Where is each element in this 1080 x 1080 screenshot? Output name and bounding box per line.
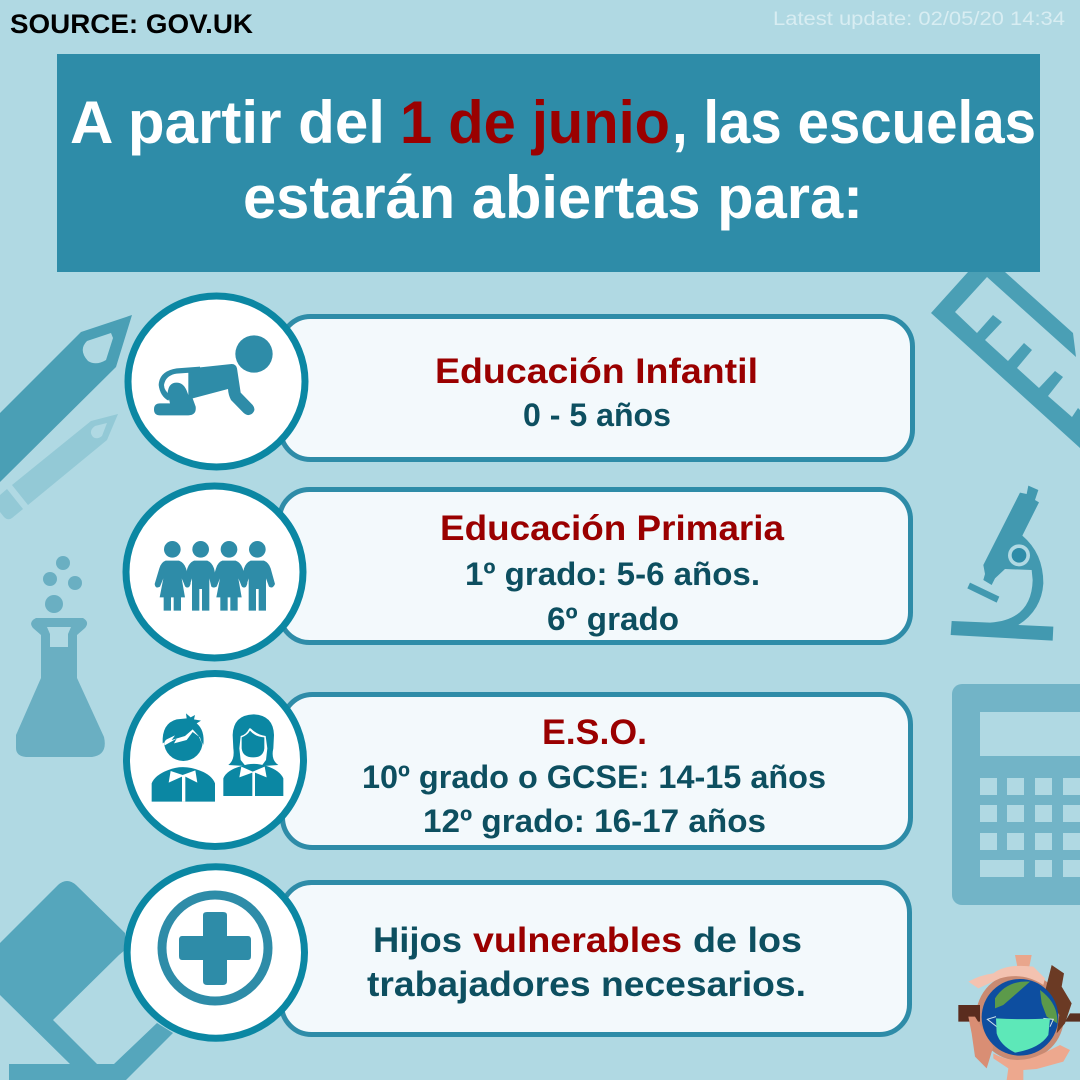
statement text — [367, 921, 806, 1004]
title banner: A partir del — [70, 89, 385, 156]
panel: E.S.O. — [282, 694, 910, 848]
statement text: trabajadores necesarios. — [367, 965, 806, 1004]
grades: secundaria: 12º grado: 16-17 años — [423, 803, 766, 839]
panel: Educación Infantil — [280, 316, 912, 460]
circle icon: crawling baby — [128, 296, 305, 467]
circle icon: group of children — [126, 486, 303, 658]
title banner: 1 de junio — [400, 89, 670, 156]
medical cross ring — [162, 895, 268, 1001]
circle icon: boy and girl students — [126, 674, 304, 846]
girl student — [223, 714, 283, 796]
title banner: , las escuelas — [672, 89, 1036, 156]
grades: primaria — [465, 556, 760, 637]
heading: Educación Infantil: Educación Infantil — [435, 352, 758, 391]
heading: Educación Primaria: Educación Primaria — [440, 509, 785, 548]
panel: hijos vulnerables — [282, 882, 910, 1034]
icon: small pencil — [0, 414, 118, 519]
statement text: de los — [693, 921, 802, 960]
source label: SOURCE: GOV.UK — [10, 9, 254, 39]
icon: tilted book stand — [0, 881, 173, 1080]
icon: large pen — [0, 315, 132, 482]
heading: E.S.O.: E.S.O. — [542, 713, 647, 752]
latest update timestamp: Latest update: 02/05/20 14:34 — [773, 9, 1065, 30]
panel: Educación Primaria — [280, 490, 910, 642]
age range: infantil: 0 - 5 años — [523, 397, 671, 433]
icon: microscope — [951, 486, 1053, 641]
icon: flask with bubbles — [16, 556, 105, 757]
boy student — [152, 713, 215, 802]
logo: globe with mask in hands — [958, 955, 1080, 1080]
title banner — [57, 54, 1040, 272]
icon: ruler — [931, 272, 1080, 448]
statement text: Hijos — [373, 921, 462, 960]
grades: primaria: 1º grado: 5-6 años. — [465, 556, 760, 592]
statement text: vulnerables — [473, 921, 682, 960]
title banner: estarán abiertas para: — [243, 164, 863, 231]
icon: calculator — [952, 684, 1080, 905]
grades: secundaria: 10º grado o GCSE: 14-15 años — [362, 759, 826, 795]
grades: secundaria — [362, 759, 826, 839]
circle icon: medical cross — [127, 867, 304, 1038]
grades: primaria: 6º grado — [547, 601, 679, 637]
